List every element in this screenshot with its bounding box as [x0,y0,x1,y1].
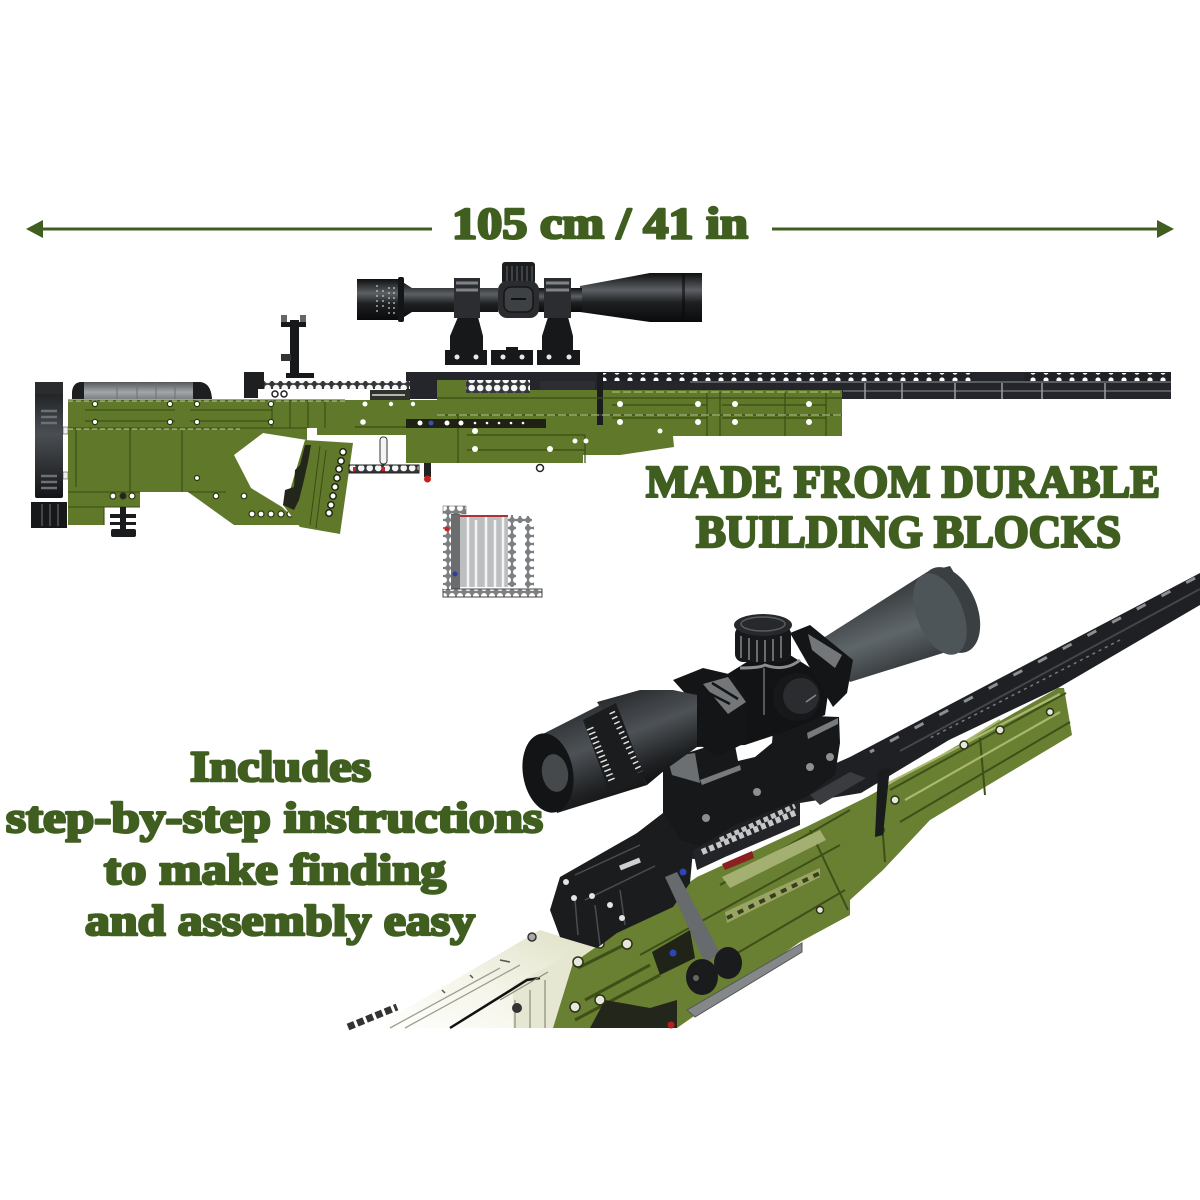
green fore-end [317,372,842,463]
text block: instructions: and assembly easy [85,898,476,945]
ocular lens [516,729,580,817]
barrel and top rail [406,372,1171,399]
side turret [773,673,821,721]
scope mount [663,715,840,846]
heading: durable building blocks: MADE FROM DURABLE [646,457,1160,507]
black barrel [640,573,1200,860]
ocular body [537,703,647,813]
heading: durable building blocks: BUILDING BLOCKS [696,507,1121,557]
elevation turret [734,614,792,662]
gray lower rail [687,943,802,1017]
rear sight [281,315,314,378]
butt pad [31,382,68,528]
spare parts pack [443,506,542,597]
bolt handle [665,872,742,995]
dimension arrow: left [26,220,432,238]
cheek rest [72,382,212,399]
perspective rifle [348,558,1200,1028]
objective bell [820,558,992,682]
scope mounts [445,317,580,365]
magazine grip [283,440,353,534]
bipod foot [110,507,136,537]
heading: durable building blocks [646,457,1160,557]
scope [357,262,702,322]
text block: instructions: to make finding [104,847,447,894]
green fore-end [553,688,1072,1028]
black receiver [550,813,700,948]
blue and red pins [668,868,686,1028]
top link row [693,803,800,870]
ocular taper [597,690,697,785]
green stock [68,400,345,525]
black upright band [875,767,890,837]
white stock [348,930,597,1028]
text block: instructions: step-by-step instructions [6,795,543,842]
rear receiver beam [244,372,410,400]
front ring [790,625,853,707]
forward links and trigger [349,437,544,482]
scope tube and saddle [697,655,830,747]
text block: instructions: Includes [190,744,371,791]
dimension arrow: right [772,220,1174,238]
rear ring [673,668,748,757]
dimension label: 105 cm / 41 in [452,199,748,248]
side view rifle [31,262,1171,537]
bottom scope [516,558,992,817]
text block: instructions [6,744,543,945]
